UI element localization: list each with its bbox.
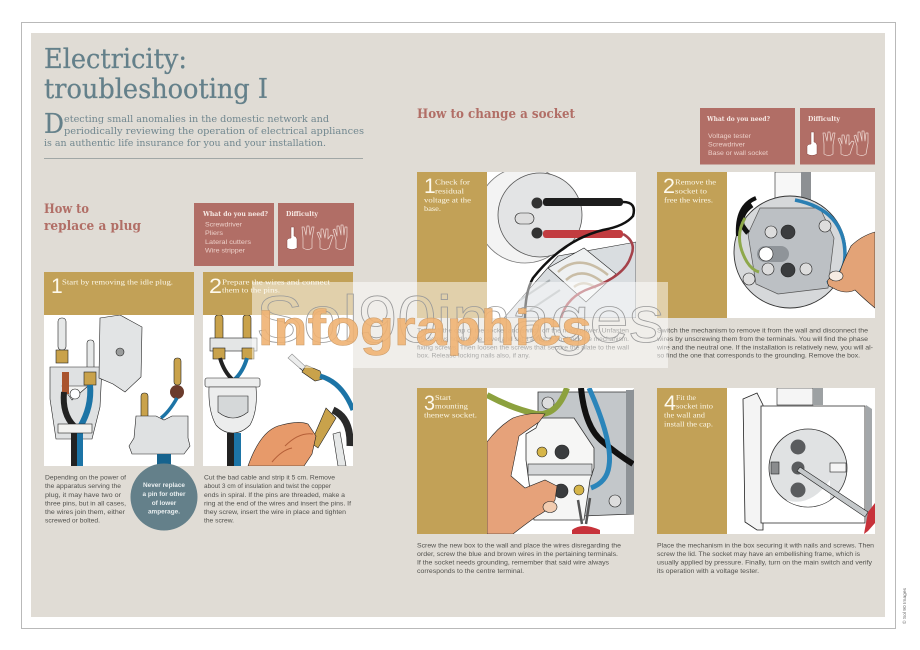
step: socket 2: Remove the [675,178,717,186]
text: plug 2 instructions: Cut the bad cable and strip it 5 cm. Remove [204,474,335,482]
step: socket 4: Fit the [676,393,697,402]
title: Electricity: [44,44,187,75]
illustration: wiring a plug [203,315,353,466]
step: socket 4: the wall and [664,410,705,420]
text: socket 1 instructions: the screws holding the cover and set it aside, then check the mechanism. [417,336,629,343]
text: plug 2 instructions: about 3 cm of insulation and twist the copper [204,483,332,490]
illustration: mounting the socket [487,388,634,534]
step: plug 2: them to the pins. [222,286,280,294]
heading: how to replace a plug [44,202,141,234]
step: plug 1 [44,272,194,466]
watermark: Sol90images [256,282,664,356]
panel: socket tools: What do you need? [706,116,770,123]
text: socket 3 instructions: order, screw the blue and brown wires in the pertaining terminals. [417,551,618,558]
text: socket 1 instructions: Take off the cap of the socket and switch off the main power. Unfasten [417,328,629,334]
text: socket 3 instructions: Screw the new box to the wall and place the wires disregarding the [417,542,621,550]
step: socket 1: residual [435,186,464,196]
text: socket 1 instructions: fixing screws. Then loosen the screws that secure the plate to the wall [417,344,629,352]
text: plug 1 instructions: three pins, but in all cases, [45,500,126,508]
step: socket 1 [417,167,636,318]
text: socket 3 instructions: corresponds to the centre terminal. [417,568,524,575]
step: socket 2 [657,172,875,318]
title [44,44,268,105]
step: socket 3: Start [435,393,452,402]
text: socket 2 instructions: Switch the mechanism to remove it from the wall and disconnect the [657,328,868,334]
step: socket 3: 3 [424,392,435,415]
step: socket 4 [657,388,875,534]
text: socket 2 instructions [656,328,873,360]
text: socket 1 instructions: box. Release locking nails also, if any. [417,352,530,360]
callout: pin warning: Never replace [143,482,185,489]
intro text: D [44,109,64,140]
panel: plug tools: Pliers [205,230,224,237]
panel: socket tools [700,108,795,164]
panel: plug tools [194,203,274,266]
heading: how to change a socket: How to change a socket [417,107,575,122]
text: plug 2 instructions: the screw. [204,518,234,524]
step: plug 2: 2 [209,275,222,298]
panel: socket tools: Screwdriver [708,142,746,148]
text: plug 2 instructions: ring at the end of the wires and insert the pins. If [204,500,351,508]
text: plug 2 instructions: they screw, insert the wire in place and tighten [204,509,346,516]
callout: pin warning: amperage. [148,508,180,516]
intro text: periodically reviewing the operation of electrical appliances [64,126,364,137]
callout: pin warning [130,464,198,530]
text: plug 1 instructions: the wires join them, either [45,509,126,516]
step: socket 3 [417,388,634,534]
text: plug 1 instructions: screwed or bolted. [45,518,100,524]
text: plug 2 instructions: ends in spiral. If the pins are threaded, make a [204,492,345,499]
intro text [44,109,364,149]
step: socket 4: install the cap. [664,420,713,428]
step: socket 1: base. [424,204,441,213]
intro text: is an authentic life insurance for you and your installation. [44,138,326,149]
watermark: Infographics [258,300,592,356]
illustration: plug parts [44,315,194,466]
text: socket 2 instructions: wires by unscrewing them from the terminals. You will find the phase [656,336,868,343]
icon: difficulty hands [807,131,868,156]
text: socket 3 instructions [417,542,621,575]
callout: pin warning: a pin for other [143,491,186,498]
step: socket 2: 2 [663,175,675,198]
illustration: socket mechanism [727,172,875,318]
step: socket 1: Check for [435,178,471,186]
step: plug 2 [203,272,353,466]
text: socket 2 instructions: wire and the neutral one. If the installation is relatively new, you will al- [656,344,873,352]
panel: plug tools: Lateral cutters [205,239,252,246]
text: socket 2 instructions: so find the one that corresponds to the grounding. Remove the box. [657,352,860,360]
heading: how to replace a plug: How to [44,202,89,217]
illustration: testing voltage [477,167,636,318]
text: socket 4 instructions: Place the mechanism in the box securing it with nails and screws. Then [657,542,874,550]
panel: plug tools: What do you need? [202,211,268,218]
step: plug 2: Prepare the wires and connect [222,278,331,286]
text: plug 1 instructions: plug, it may have two or [45,492,122,499]
step: socket 4: socket into [676,402,713,410]
step: socket 3: thenew socket. [424,410,477,420]
panel: socket tools: Voltage tester [708,133,752,140]
panel: plug difficulty: Difficulty [286,211,319,218]
text: socket 4 instructions [657,542,874,575]
icon: difficulty hands [287,225,347,250]
step: socket 2: free the wires. [664,196,713,204]
text: socket 1 instructions [417,328,629,360]
text: plug 1 instructions [45,474,126,524]
text: socket 4 instructions: usually applied by pressure. Finally, turn on the main switch and verify [657,560,873,566]
text: plug 2 instructions [204,474,351,524]
illustration: fitting the cap [727,388,875,534]
panel: plug tools: Wire stripper [205,248,246,254]
text: socket 3 instructions: If the socket needs grounding, remember that said wire always [417,560,609,566]
step: socket 3: mounting [435,402,468,410]
credit: © Sol 90 Images [901,587,907,624]
intro text: etecting small anomalies in the domestic network and [64,114,329,125]
panel: plug tools: Screwdriver [205,222,243,228]
callout: pin warning: of lower [152,500,177,507]
panel: plug difficulty [278,203,354,266]
step: socket 1: 1 [424,175,436,198]
text: plug 1 instructions: the apparatus serving the [45,483,121,490]
panel: socket tools: Base or wall socket [708,150,768,157]
step: plug 1: 1 [51,275,63,298]
panel: socket difficulty: Difficulty [808,116,841,123]
heading: how to replace a plug: replace a plug [44,219,141,234]
text: socket 4 instructions: screw the lid. The socket may have an embellishing frame, which is [657,551,860,558]
title: troubleshooting I [44,74,268,105]
panel: socket difficulty [800,108,875,164]
step: socket 2: socket to [675,186,707,196]
step: socket 4: 4 [664,392,676,415]
text: plug 1 instructions: Depending on the power of [45,474,126,482]
step: socket 1: voltage at the [424,196,472,204]
text: socket 4 instructions: its operation with a voltage tester. [657,568,759,575]
step: plug 1: Start by removing the idle plug. [62,278,173,286]
